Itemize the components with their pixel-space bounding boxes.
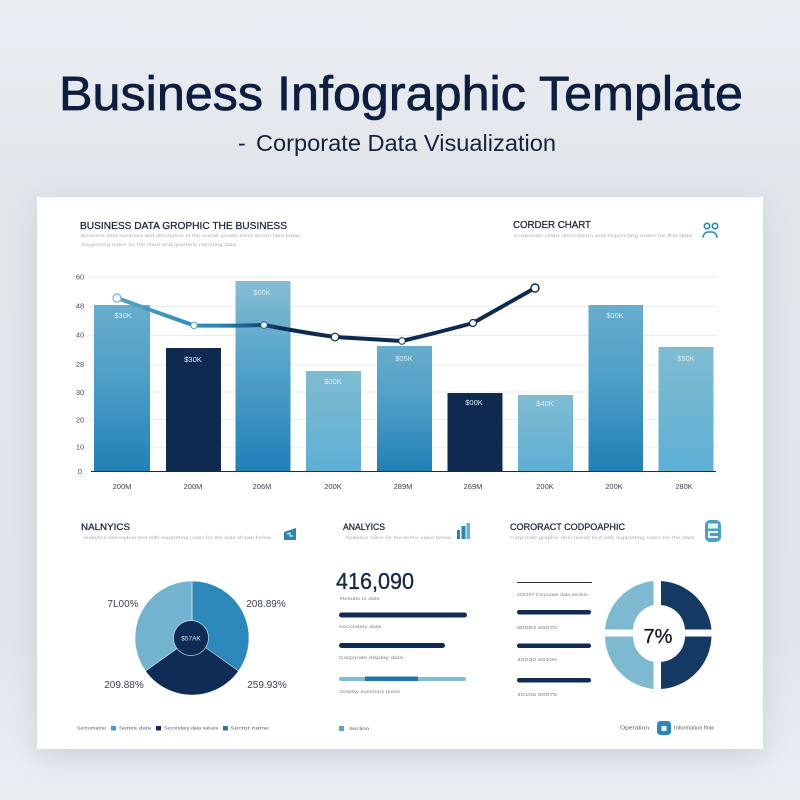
panel: analytics metric bars [336, 522, 470, 732]
grid lines [89, 277, 717, 447]
bar value labels: $00K [324, 377, 342, 386]
bar value labels: $50K [677, 354, 695, 363]
donut legend: Information flow [674, 726, 714, 732]
progress bar 2 [339, 643, 445, 648]
pie heading: NALNYICS [81, 522, 130, 533]
big number: 416,090 [336, 568, 414, 594]
x axis labels: 269M [464, 482, 482, 491]
x axis labels: 200M [113, 482, 131, 491]
bar value labels: $05K [395, 354, 413, 363]
subtitle: Corporate Data Visualization [256, 130, 556, 156]
chart description [81, 233, 301, 247]
x axis labels: 200K [324, 482, 342, 491]
y axis labels: 40 [76, 330, 84, 340]
pie labels: 259.93% [247, 680, 287, 691]
pie legend [77, 726, 269, 732]
pie labels: 209.88% [104, 680, 144, 691]
x axis labels: 200K [536, 482, 554, 491]
pie chart [135, 581, 249, 695]
bar value labels: $30K [184, 355, 202, 364]
donut heading: CORORACT CODPOAPHIC [510, 522, 625, 533]
pie labels [104, 599, 287, 691]
metric caption 4: Display summary notes [340, 689, 401, 695]
icon: bars [457, 523, 470, 539]
chart heading: right: CORDER CHART [513, 220, 591, 231]
pie labels: 208.89% [246, 599, 286, 610]
y axis labels: 30 [76, 388, 84, 397]
donut legend: Operation [620, 726, 649, 732]
list rule [517, 582, 592, 584]
list caption 1: 200107 Corporate data section [517, 592, 588, 598]
donut description: Corporate graphic description text with supporting notes for the data [510, 535, 695, 540]
metric caption 1: Results to date [340, 596, 380, 602]
pie legend: Sector name [230, 726, 269, 732]
progress bar 1 [339, 612, 467, 618]
donut chart [605, 581, 712, 689]
bar value labels: $00K [465, 398, 483, 407]
panel: analytics pie [77, 522, 296, 732]
list bar 1 [517, 610, 591, 614]
y axis labels: 10 [76, 442, 84, 452]
y axis labels: 48 [76, 302, 84, 310]
pie legend: Sectorname [77, 726, 106, 732]
metric description: Analytics notes for the metric value below [345, 535, 452, 540]
metric legend: Section [349, 726, 369, 732]
chart description: Supporting notes for the chart and quarterly reporting data [81, 242, 237, 247]
icon: printer [705, 520, 721, 542]
y axis labels: 20 [76, 416, 84, 424]
pie labels: 7L00% [107, 599, 139, 610]
progress bar 3 [339, 676, 466, 681]
y axis labels [76, 272, 84, 476]
panel: bar and line chart [76, 220, 718, 491]
card shadow [37, 205, 763, 757]
metric legend [339, 726, 369, 732]
bar value labels: $30K [114, 311, 132, 320]
chart heading: BUSINESS DATA GROPHIC THE BUSINESS [80, 220, 287, 232]
list caption 3: 40030 60105 [517, 657, 557, 663]
x axis labels: 206M [253, 482, 271, 491]
x axis labels: 200K [605, 482, 623, 491]
pie centre [174, 620, 208, 656]
chart description: right: Corporate chart description and supporting notes for this data [514, 233, 693, 238]
metric caption 3: Corporate display data [339, 655, 403, 661]
bars [94, 281, 714, 471]
metric heading: ANALYICS [343, 522, 385, 532]
panel: analytics pie: $57AK [181, 636, 201, 642]
x axis labels: 289M [394, 482, 412, 491]
pie legend: Secondary data values [164, 726, 219, 732]
chart description: Business data summary and description of the overall growth trend shown here today [81, 233, 301, 238]
x axis labels [113, 482, 693, 491]
list caption 4: 40105 60075 [517, 692, 557, 698]
pie legend: Series data [119, 726, 151, 732]
icon: analytics badge [284, 528, 296, 540]
bar value labels: $00K [606, 311, 624, 320]
donut legend [620, 721, 714, 735]
trend line [113, 284, 539, 344]
title: Business Infographic Template [59, 68, 743, 121]
x axis labels: 280K [675, 482, 693, 491]
bar value labels: $40K [536, 399, 554, 408]
axis baseline [91, 470, 716, 472]
list caption 2: 80093 60070 [517, 625, 557, 631]
donut value: 7% [644, 626, 673, 648]
x axis labels: 200M [184, 482, 202, 491]
metric caption 2: Secondary data [339, 624, 381, 630]
list bar 3 [517, 678, 591, 682]
subtitle: - [238, 130, 246, 156]
bar value labels [114, 288, 695, 408]
y axis labels: 28 [76, 360, 84, 369]
list bar 2 [517, 644, 591, 648]
y axis labels: 0 [78, 467, 82, 476]
panel: corporate donut [510, 520, 721, 735]
icon: people [703, 223, 718, 237]
y axis labels: 60 [76, 272, 84, 282]
pie description: Analytics description text with supporting notes for the data shown below [83, 535, 272, 540]
bar value labels: $00K [253, 288, 271, 297]
main panel card [37, 197, 763, 749]
